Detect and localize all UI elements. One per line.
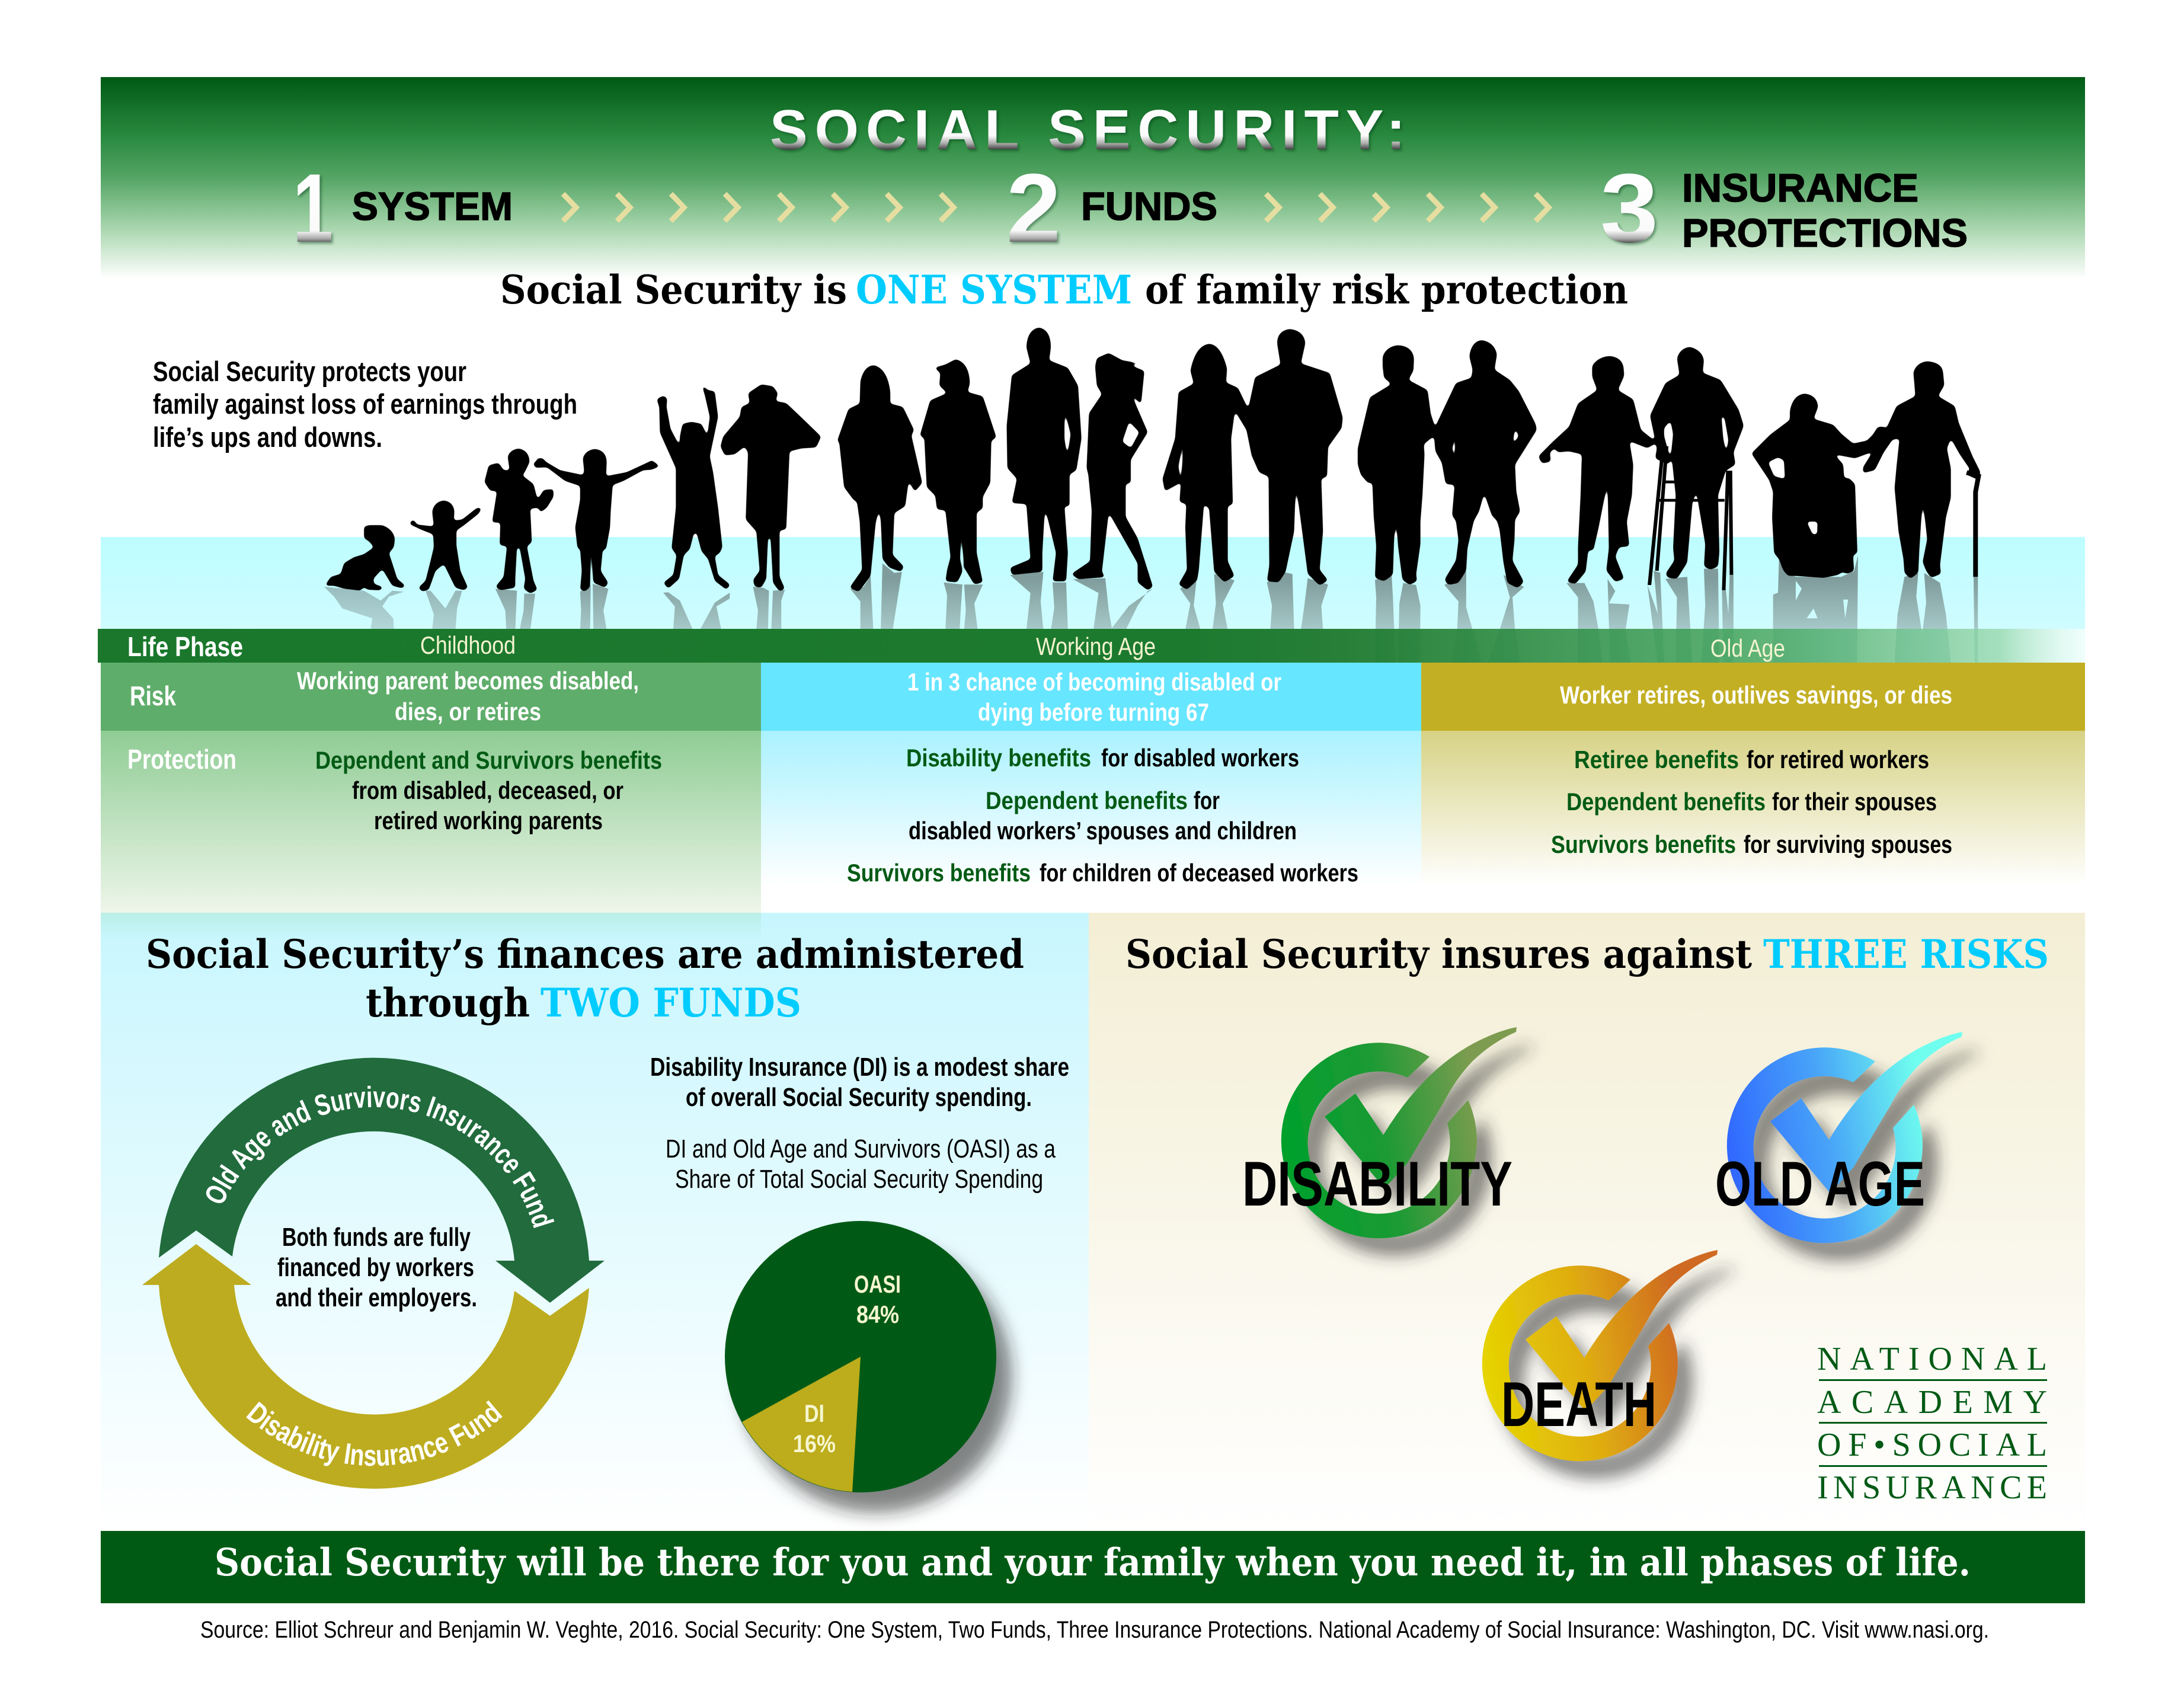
step 1: system: [293, 154, 513, 263]
ring centre text: [276, 1223, 477, 1312]
silhouette: person in wheelchair: [1751, 394, 1886, 578]
silhouette: crawling baby: [325, 525, 405, 591]
reflections: children: [324, 584, 785, 630]
childhood protections: retired working parents: [374, 807, 603, 835]
risk row backgrounds: [101, 663, 2085, 731]
chevron arrows: system to funds: [563, 194, 954, 221]
logo: national academy of social insurance: NATIONAL: [1817, 1341, 2047, 1377]
silhouette: older woman: [1538, 356, 1658, 584]
risk row text: dying before turning 67: [978, 698, 1209, 726]
ring centre text: financed by workers: [277, 1253, 474, 1282]
silhouette: middle-aged man: [1358, 345, 1437, 585]
DI share text: of overall Social Security spending.: [686, 1083, 1032, 1112]
intro text: Social Security protects your: [153, 356, 466, 387]
step 1: system: SYSTEM: [352, 184, 513, 229]
heading: three risks: THREE RISKS: [1763, 931, 2049, 977]
silhouettes: older adults: [1358, 340, 1744, 588]
intro text: family against loss of earnings through: [153, 388, 577, 420]
reflections: young adults: [850, 564, 1328, 630]
icon: orange check: [1482, 1250, 1718, 1461]
step 2: funds: 2: [1006, 154, 1061, 263]
pie chart: OASI: [854, 1270, 901, 1298]
silhouette: young man with cap: [920, 359, 996, 584]
silhouette: boy arms raised: [657, 384, 730, 590]
heading: three risks: Social Security insures against: [1125, 931, 1752, 977]
working age protections: [847, 744, 1358, 887]
old age protections: Retiree benefits: [1574, 746, 1739, 773]
pie chart title: [666, 1134, 1056, 1194]
old age protections: for their spouses: [1772, 788, 1937, 816]
table: life phases: [98, 629, 2085, 913]
intro text: life’s ups and downs.: [153, 421, 382, 453]
header banner: [101, 77, 2085, 279]
label: old age: OLD AGE: [1715, 1148, 1925, 1219]
pie chart: 16%: [793, 1430, 836, 1457]
step 2: funds: [1006, 154, 1217, 263]
icon: green check: [1281, 1027, 1517, 1238]
heading: one system: Social Security is: [500, 267, 847, 313]
silhouettes: young adults: [837, 327, 1343, 592]
pie chart title: DI and Old Age and Survivors (OASI) as a: [666, 1134, 1056, 1163]
pie chart: DI: [804, 1399, 824, 1427]
working age protections: for disabled workers: [1101, 744, 1299, 772]
logo: national academy of social insurance: [1817, 1341, 2047, 1506]
risk row text: dies, or retires: [395, 698, 541, 725]
logo: national academy of social insurance: INSURANCE: [1817, 1469, 2047, 1506]
silhouette: child arms out: [533, 449, 660, 592]
intro text: [153, 356, 577, 453]
ring centre text: and their employers.: [276, 1283, 477, 1312]
pie chart: [725, 1221, 996, 1492]
risk row text: 1 in 3 chance of becoming disabled or: [907, 668, 1281, 696]
working age protections: Survivors benefits: [847, 859, 1031, 887]
footer banner: Social Security will be there for you and your family when you need it, in all phases of life.: [215, 1540, 1971, 1585]
heading: two funds: TWO FUNDS: [541, 980, 801, 1026]
protection row label: Protection: [127, 744, 236, 775]
heading: one system: [500, 267, 1628, 313]
silhouette: woman with ponytail: [1072, 353, 1153, 590]
life phase bar: [98, 629, 2085, 663]
chevron arrows: funds to insurance: [1266, 194, 1549, 221]
risk row text: Worker retires, outlives savings, or dies: [1560, 681, 1952, 709]
life phase bar: Old Age: [1710, 634, 1785, 662]
step 2: funds: FUNDS: [1081, 184, 1217, 229]
life phase bar: Childhood: [420, 631, 516, 659]
logo: national academy of social insurance: OF•SOCIAL: [1817, 1427, 2047, 1463]
working age protections: Disability benefits: [906, 744, 1091, 772]
pie chart title: Share of Total Social Security Spending: [675, 1165, 1043, 1194]
childhood protections: Dependent and Survivors benefits: [315, 746, 662, 774]
silhouette: toddler: [409, 500, 482, 592]
old age protections: for retired workers: [1747, 746, 1929, 773]
risk row text: [130, 667, 1952, 726]
icon: walker frame: [1649, 446, 1731, 590]
silhouette: child with glove: [484, 449, 554, 594]
label: disability: DISABILITY: [1242, 1148, 1513, 1219]
old age protections: [1551, 746, 1952, 858]
step 3: insurance protections: 3: [1600, 154, 1658, 263]
pie chart: 84%: [856, 1300, 899, 1328]
risk row text: Working parent becomes disabled,: [297, 667, 639, 695]
ring centre text: Both funds are fully: [282, 1223, 471, 1252]
old age protections: Survivors benefits: [1551, 830, 1736, 858]
silhouettes: childhood: [325, 384, 821, 594]
step 1: system: 1: [293, 154, 333, 263]
heading: two funds: through: [366, 980, 530, 1026]
silhouette: older woman: [1863, 361, 1981, 579]
silhouette: man in suit: [1236, 329, 1343, 586]
DI share text: Disability Insurance (DI) is a modest share: [650, 1053, 1069, 1082]
icon: blue check: [1727, 1032, 1962, 1243]
silhouette: woman in dress: [1162, 344, 1248, 590]
DI share text: [650, 1053, 1069, 1112]
panel: two funds: [101, 913, 1089, 1526]
step 3: insurance protections: [1600, 154, 1968, 263]
working age protections: Dependent benefits: [986, 787, 1188, 814]
life phase bar: Life Phase: [127, 631, 243, 662]
label: death: DEATH: [1501, 1369, 1657, 1440]
working age protections: for children of deceased workers: [1040, 859, 1358, 887]
working age protections: disabled workers’ spouses and children: [909, 817, 1297, 845]
silhouette: girl hands on head: [721, 384, 821, 592]
old age protections: Dependent benefits: [1566, 788, 1766, 816]
ring arrow: old age and survivors fund: Old Age and Survivors Insurance Fund: [206, 1086, 555, 1228]
reflections: older adults: [1375, 569, 1734, 663]
heading: two funds: Social Security’s finances are administered: [146, 931, 1024, 977]
silhouette: heavier man in shorts: [1434, 340, 1537, 588]
life phase bar: Working Age: [1036, 632, 1156, 660]
reflections: wheelchair and cane: [1773, 555, 1978, 663]
ring arrow: disability insurance fund: Disability Insurance Fund: [246, 1400, 503, 1466]
floor band: [101, 537, 2085, 629]
childhood protections: from disabled, deceased, or: [352, 776, 623, 804]
step 3: insurance protections: INSURANCE: [1682, 166, 1918, 210]
working age protections: for: [1194, 787, 1220, 814]
title: SOCIAL SECURITY:: [770, 98, 1412, 162]
ring arrow: old age and survivors fund: [159, 1057, 605, 1303]
ring arrow: disability insurance fund: [142, 1244, 589, 1489]
old age protections: for surviving spouses: [1744, 830, 1952, 858]
childhood protections: [315, 746, 662, 835]
logo: national academy of social insurance: ACADEMY: [1817, 1384, 2047, 1421]
step 3: insurance protections: PROTECTIONS: [1682, 211, 1968, 255]
silhouette: young woman: [837, 365, 922, 592]
heading: one system: ONE SYSTEM: [856, 267, 1132, 313]
silhouette: tall man in shorts: [1006, 327, 1082, 581]
panel: three risks: [1089, 913, 2085, 1531]
footer banner: [101, 1531, 2085, 1603]
silhouettes: wheelchair user and woman with cane: [1751, 361, 1981, 579]
heading: two funds: [146, 931, 1024, 1026]
risk row text: Risk: [130, 680, 176, 711]
protection row backgrounds: [101, 731, 2085, 913]
heading: one system: of family risk protection: [1145, 267, 1628, 313]
silhouette: man behind walker: [1650, 347, 1744, 579]
icon: cane: [1966, 472, 1978, 577]
